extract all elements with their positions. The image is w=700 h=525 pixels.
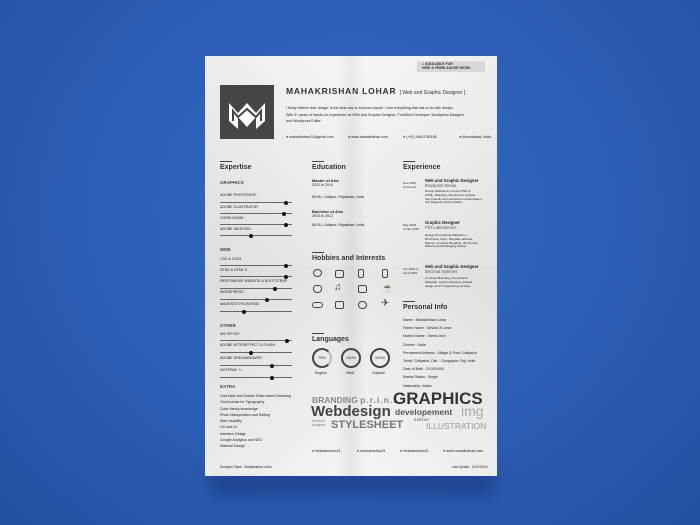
bio (286, 106, 464, 123)
text: Permanent Address : Village & Post: Gallyakot (403, 351, 477, 355)
expertise column: OTHER (220, 323, 236, 328)
bio: With 3+ years of hands-on experience as Web and Graphic Designer, FrontEnd Developer, Wordpress Designer (286, 112, 464, 116)
experience: design and IT Supporting services (425, 284, 470, 288)
experience: Graphic Designer (425, 220, 460, 225)
text: Nationality: Indian (403, 384, 432, 388)
expertise column: ADOBE ILLUSTRATOR (220, 205, 258, 209)
expertise column: MS OFFICE (220, 332, 240, 336)
experience: Decimal Systems (425, 269, 457, 274)
shadow (210, 470, 495, 495)
text: Mother Name : Geeta Devi (403, 334, 446, 338)
expertise column: NOTEPAD ++ (220, 368, 242, 372)
word cloud: frontend (312, 419, 325, 423)
experience: June 2015 (403, 271, 417, 275)
experience: to Nov 2015 (403, 227, 419, 231)
expertise column: Grid base and Golden Ratio based Branding (220, 394, 291, 398)
experience: May 2015 (403, 223, 416, 227)
word cloud: ILLUSTRATION (426, 421, 486, 431)
expertise column: Interface Design (220, 432, 246, 436)
education: MLSU, Udaipur, Rajasthan, India (312, 195, 364, 199)
text: Hobbies and Interests (312, 255, 385, 262)
text: Hindi (346, 371, 354, 375)
text: Date of Birth : 21/10/1992 (403, 367, 444, 371)
expertise column: EXTRA (220, 384, 235, 389)
text: Expertise (220, 164, 252, 171)
text: Gujarati (372, 371, 385, 375)
headings (220, 161, 232, 162)
text: 75% (318, 355, 326, 360)
experience: In House Branding, Promotional (425, 276, 468, 280)
personal info (403, 301, 415, 302)
experience: Materials, social marketing, website (425, 280, 472, 284)
text: ✈ (381, 298, 389, 309)
text: ♫ (334, 282, 342, 293)
education: 2010 to 2012 (312, 214, 333, 218)
text: Experience (403, 164, 440, 171)
badge (417, 61, 485, 72)
text: 100% (375, 355, 385, 360)
experience: and Magento Customisation (425, 200, 462, 204)
contacts: ● mahakrishan21@gmail.com (286, 135, 334, 139)
experience: to Current (403, 185, 416, 189)
word cloud: Webdesign (311, 403, 391, 420)
text: ● /mahakrishan21 (357, 449, 386, 453)
text: Education (312, 164, 346, 171)
text: Tehsil: Gallyakot, Dist. : Dungarpur, Raj. India (403, 359, 475, 363)
text: ● /mahakrishan21 (400, 449, 429, 453)
logo (220, 85, 274, 139)
word cloud: developement (395, 407, 452, 417)
experience: Seo Friendly and wordpress customisation (425, 197, 482, 201)
expertise column: ADOBE PHOTOSHOP (220, 193, 256, 197)
expertise column: MAGENTO FRONTEND (220, 302, 259, 306)
badge: ● AVAILABLE FOR (422, 62, 453, 66)
expertise column: CORELDRAW (220, 216, 243, 220)
experience: PDI Laboratories (425, 225, 456, 230)
bio: and Wordpress Editor (286, 119, 321, 123)
experience: Web and Graphic Designer (425, 178, 478, 183)
word cloud: BRANDING p.r.i.n.t (312, 395, 397, 405)
expertise column (220, 180, 292, 448)
word cloud: img (461, 403, 484, 419)
education: 2012 to 2014 (312, 183, 333, 187)
text: Last Update : 11/07/2016 (452, 465, 488, 469)
experience: Design Website & Convert PSD to (425, 189, 470, 193)
expertise column: WORDPRESS (220, 290, 244, 294)
social footer: ● /mahakrishan21 (312, 449, 341, 453)
expertise column: Material Design (220, 444, 245, 448)
expertise column: Web Usability (220, 419, 242, 423)
expertise column: GRAPHICS (220, 180, 244, 185)
experience: Brochures, Flyer, Template, Ebooks, (425, 237, 473, 241)
text: Gender : Male (403, 343, 426, 347)
experience: Nov 2015 (403, 181, 416, 185)
footer: Dumpton Place : Mahakrishan Lohar (220, 465, 272, 469)
languages (312, 333, 324, 334)
word cloud: editor (414, 417, 430, 422)
hobbies (312, 252, 324, 253)
word cloud: designer (312, 423, 325, 427)
word cloud (311, 389, 486, 431)
paper (205, 56, 497, 476)
education: Master of Arts (312, 178, 339, 183)
expertise column: CSS & CSS3 (220, 257, 241, 261)
text: ● (+91) 94613 80185 (403, 135, 437, 139)
text: Languages (312, 336, 349, 343)
experience (403, 178, 482, 288)
expertise column: HTML & HTML 5 (220, 268, 247, 272)
education: Bachelor of Arts (312, 209, 343, 214)
text: Father Name : Devilal Ji Lohar (403, 326, 452, 330)
experience: Jun 2013 to (403, 267, 419, 271)
education: MLSU, Udaipur, Rajasthan, India (312, 223, 364, 227)
text: ● www.mahakrishan.com (443, 449, 483, 453)
experience: Web and Graphic Designer (425, 264, 478, 269)
word cloud: STYLESHEET (331, 419, 403, 431)
name: MAHAKRISHAN LOHAR [ Web and Graphic Designer ] (286, 86, 465, 96)
expertise column: Google Analytics and SEO (220, 438, 262, 442)
text: 100% (346, 355, 356, 360)
expertise column: ADOBE DREAMWEAVER (220, 356, 262, 360)
education (312, 178, 364, 227)
text: Name : Mahakrishan Lohar (403, 318, 446, 322)
expertise column: Color theory knowledge (220, 407, 258, 411)
text: English (315, 371, 327, 375)
expertise column: UX and UI (220, 425, 237, 429)
expertise column: Good sense for Typography (220, 400, 264, 404)
experience: Bluelpoint Media (425, 183, 456, 188)
experience: Banner, In-House Branding, 3D Printing (425, 241, 478, 245)
text: ☕ (382, 283, 393, 293)
badge: HIRE & FREELANCER WORK (422, 66, 471, 70)
text: ● www.mahakrishan.com (348, 135, 388, 139)
expertise column: WEB (220, 247, 230, 252)
text: Marital Status : Single (403, 375, 438, 379)
expertise column: RESPONSIVE WEBSITE & BOOTSTRAP (220, 279, 287, 283)
text: Personal Info (403, 304, 447, 311)
text: ● Ahmedabad, India (459, 135, 491, 139)
expertise column: Photo Manipulation and Editing (220, 413, 270, 417)
expertise column: ADOBE AFTEREFFECT & FLASH (220, 343, 275, 347)
bio: I firmly believe that 'design' is the best way to express myself. I love everything that has to do with design. (286, 106, 454, 110)
experience: HTML, Branding, Responsive website, (425, 193, 476, 197)
experience: Material and Packaging Design (425, 244, 467, 248)
word cloud: GRAPHICS (393, 389, 483, 408)
expertise column: ADOBE INDESIGN (220, 227, 251, 231)
experience: Design Promotional Material i.e. (425, 233, 468, 237)
